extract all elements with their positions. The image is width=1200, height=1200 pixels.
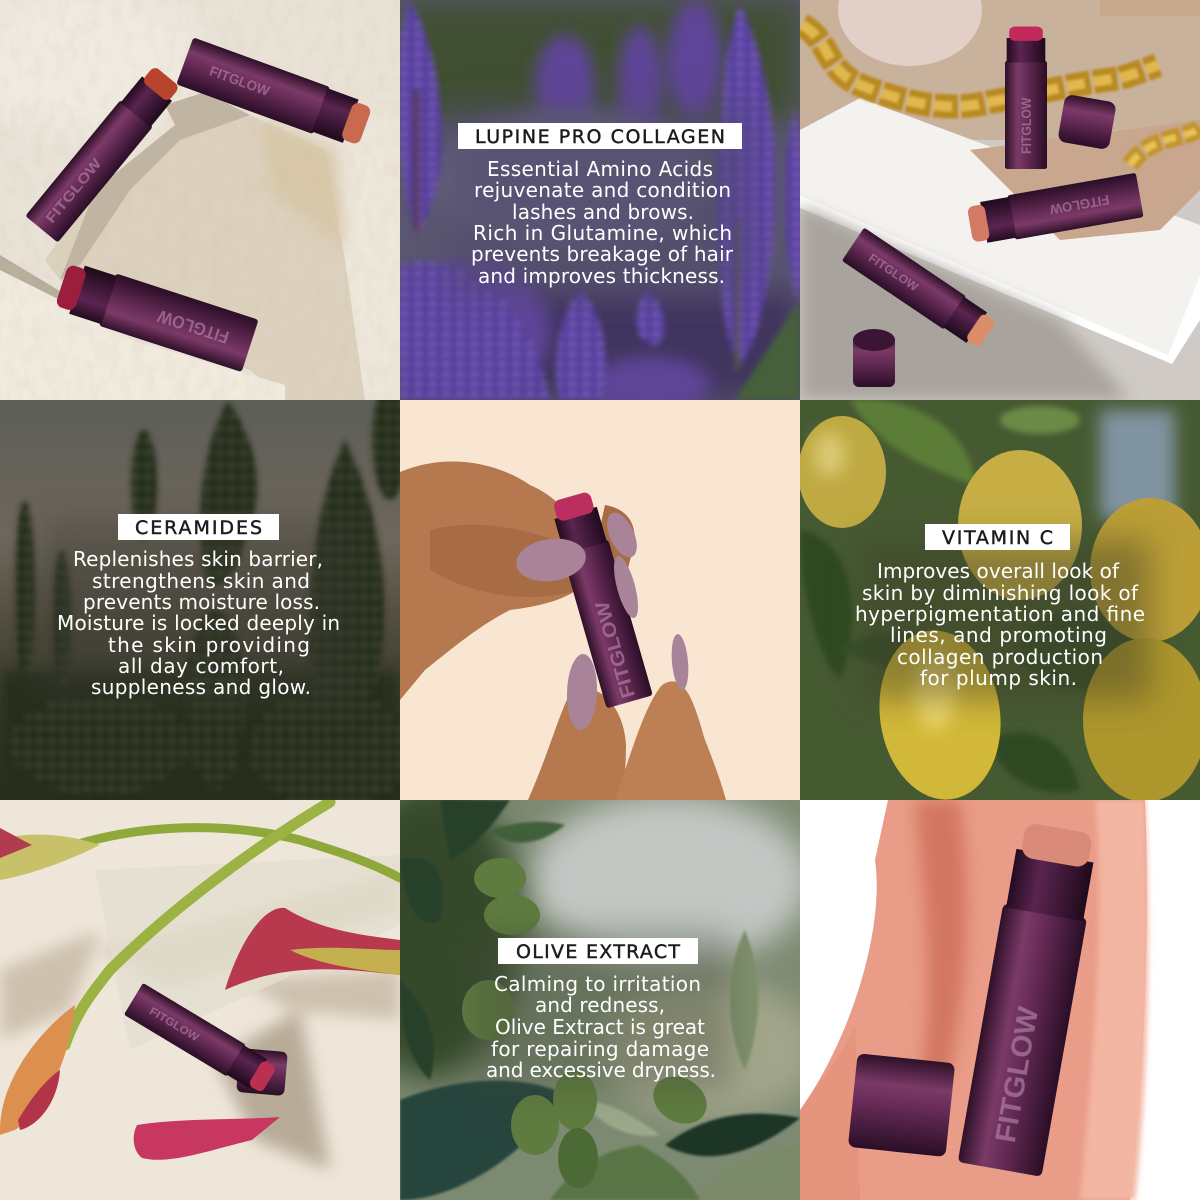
fingernails bbox=[513, 508, 690, 731]
lipstick: lower bbox=[53, 259, 259, 372]
text: vitamin c description: hyperpigmentation and fine bbox=[855, 602, 1145, 626]
text: ceramides description: Replenishes skin barrier, bbox=[73, 547, 323, 571]
gold chain bbox=[802, 25, 1200, 165]
text: ceramides description bbox=[57, 547, 340, 699]
lipstick: on stone: FITGLOW bbox=[147, 1006, 201, 1044]
text: vitamin c description: Improves overall look of bbox=[877, 559, 1120, 583]
lipstick: held: FITGLOW bbox=[592, 598, 640, 700]
ceramic bowl bbox=[838, 0, 1200, 66]
lipstick: on block bbox=[966, 173, 1144, 247]
lipstick: held bbox=[548, 490, 653, 708]
hand bbox=[400, 461, 726, 800]
text: olive description: Calming to irritation bbox=[494, 972, 701, 996]
stems bbox=[60, 802, 400, 1045]
panel: calla lilies and lipstick bbox=[0, 800, 400, 1200]
panel: olive extract bbox=[400, 800, 800, 1200]
text: lupine description: prevents breakage of hair bbox=[471, 242, 734, 266]
text: lupine description: rejuvenate and condition bbox=[474, 178, 731, 202]
lipstick: on floor bbox=[842, 228, 999, 352]
leaves bbox=[800, 399, 1140, 793]
text: ceramides description: strengthens skin and bbox=[92, 569, 310, 593]
background flowers bbox=[390, 0, 723, 413]
heading: ceramides: CERAMIDES bbox=[135, 517, 262, 539]
olive leaves bbox=[400, 800, 800, 1200]
lipstick: upper right: FITGLOW bbox=[207, 63, 271, 99]
panel: lipsticks on white block with gold chain bbox=[800, 0, 1200, 400]
heading: ceramides bbox=[118, 514, 279, 540]
lipstick: upper left: FITGLOW bbox=[43, 156, 105, 226]
text: vitamin c description: for plump skin. bbox=[920, 666, 1077, 690]
soft shade behind text bbox=[860, 540, 1150, 700]
lipstick: upper right bbox=[176, 37, 374, 150]
lipstick cap bbox=[236, 1048, 288, 1096]
heading: olive extract: OLIVE EXTRACT bbox=[516, 941, 680, 963]
glass plate bbox=[95, 855, 400, 1050]
text: ceramides description: Moisture is locked deeply in bbox=[57, 611, 340, 635]
lemons bbox=[798, 416, 1200, 808]
loose cap bbox=[1057, 94, 1117, 150]
text: lupine description bbox=[471, 157, 734, 288]
lipstick: on stone bbox=[124, 983, 279, 1096]
text: lupine description: Rich in Glutamine, which bbox=[473, 221, 732, 245]
panel: vitamin c bbox=[800, 400, 1200, 800]
lipstick: standing bbox=[1005, 26, 1047, 169]
lavender plants bbox=[10, 380, 410, 810]
text: ceramides description: the skin providing bbox=[108, 633, 310, 657]
flower: lower left bbox=[0, 1005, 75, 1135]
soft shade behind text bbox=[450, 105, 750, 295]
text: lupine description: Essential Amino Acids bbox=[487, 157, 713, 181]
flower: top left bbox=[0, 828, 100, 880]
text: vitamin c description bbox=[855, 559, 1145, 690]
panel: hand holding lipstick bbox=[400, 400, 800, 800]
lipstick: on floor: FITGLOW bbox=[866, 251, 921, 294]
shadow on floor bbox=[800, 205, 1130, 400]
text: ceramides description: all day comfort, bbox=[118, 654, 284, 678]
heading: lupine pro collagen: LUPINE PRO COLLAGEN bbox=[475, 126, 725, 148]
heading: vitamin c: VITAMIN C bbox=[942, 527, 1053, 549]
stone block bbox=[0, 92, 365, 400]
text: ceramides description: suppleness and glow. bbox=[91, 675, 311, 699]
soft shade behind text bbox=[40, 520, 350, 710]
text: vitamin c description: lines, and promoting bbox=[890, 623, 1107, 647]
lipstick: standing: FITGLOW bbox=[1018, 97, 1034, 154]
heading: vitamin c bbox=[925, 524, 1070, 550]
panel: lipsticks on stone bbox=[0, 0, 400, 400]
flower: right bbox=[225, 908, 400, 990]
panel: lupine pro collagen bbox=[400, 0, 800, 400]
panel: ceramides bbox=[0, 400, 400, 800]
stone veining bbox=[0, 0, 400, 400]
lipstick swatch bbox=[134, 1117, 280, 1160]
text: lupine description: lashes and brows. bbox=[512, 200, 694, 224]
olives bbox=[462, 858, 715, 1188]
soft shade behind text bbox=[470, 930, 730, 1090]
peach smear bbox=[800, 800, 1148, 1200]
lipstick cap bbox=[848, 1053, 955, 1157]
text: olive description: for repairing damage bbox=[491, 1037, 709, 1061]
text: olive description bbox=[486, 972, 716, 1082]
text: vitamin c description: skin by diminishing look of bbox=[862, 581, 1139, 605]
heading: olive extract bbox=[498, 938, 698, 964]
text: olive description: Olive Extract is great bbox=[495, 1015, 705, 1039]
lipstick: large: FITGLOW bbox=[989, 1004, 1045, 1145]
panel: lipstick on peach swatch bbox=[800, 800, 1152, 1200]
foreground lupine spikes bbox=[398, 0, 803, 400]
shadows bbox=[0, 870, 400, 1170]
text: ceramides description: prevents moisture loss. bbox=[83, 590, 320, 614]
text: olive description: and excessive dryness. bbox=[486, 1058, 716, 1082]
standing cap bbox=[853, 329, 895, 387]
white block bbox=[800, 98, 1200, 364]
lipstick: upper left bbox=[25, 63, 183, 243]
text: lupine description: and improves thickness. bbox=[478, 264, 725, 288]
lipstick: lower: FITGLOW bbox=[155, 306, 231, 347]
text: olive description: and redness, bbox=[535, 993, 665, 1017]
text: vitamin c description: collagen production bbox=[897, 645, 1103, 669]
lipstick: large bbox=[958, 821, 1102, 1177]
lipstick: on block: FITGLOW bbox=[1048, 192, 1110, 217]
